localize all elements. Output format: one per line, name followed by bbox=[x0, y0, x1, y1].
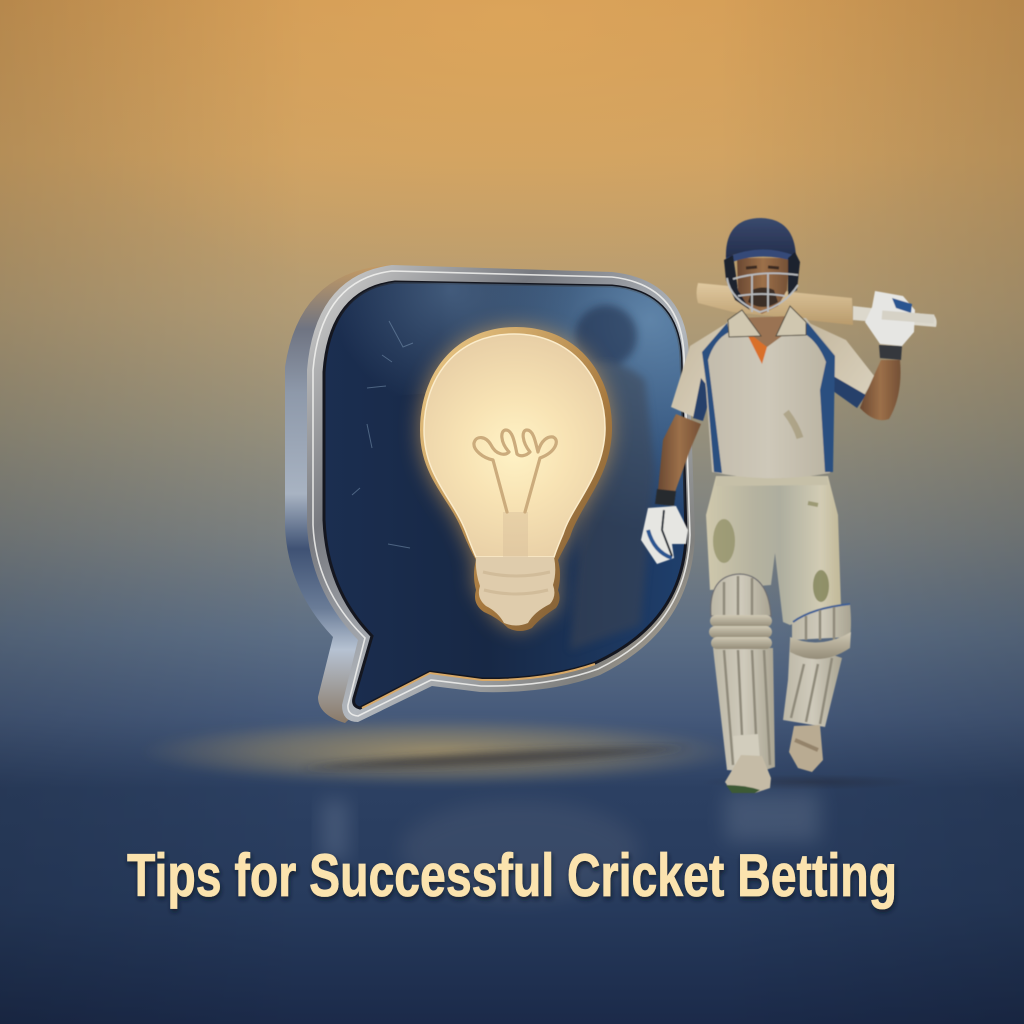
reflected silhouette of player bbox=[570, 305, 655, 650]
bulb border bbox=[420, 327, 612, 631]
back batting pad bbox=[783, 604, 851, 727]
bulb glass bbox=[424, 334, 605, 557]
surface scratches bbox=[352, 321, 413, 548]
bubble dark face bbox=[324, 282, 686, 708]
sleeves and arms bbox=[658, 322, 901, 492]
speech bubble with light bulb bbox=[285, 265, 695, 723]
cricket bat bbox=[696, 283, 937, 327]
cricket player bbox=[641, 218, 937, 793]
filament support bbox=[503, 512, 528, 557]
helmet shell bbox=[726, 218, 796, 260]
floor glow and shadow bbox=[140, 718, 920, 900]
bubble side depth bbox=[285, 265, 420, 723]
bulb glow halo bbox=[420, 327, 612, 631]
front batting pad bbox=[709, 574, 775, 772]
head with helmet bbox=[724, 218, 800, 314]
filament bbox=[474, 430, 556, 512]
bubble chrome rim bbox=[307, 265, 695, 722]
bulb base bbox=[476, 557, 555, 626]
torso shirt bbox=[702, 306, 835, 478]
light bulb bbox=[420, 327, 612, 631]
batting gloves bbox=[641, 291, 934, 564]
gold edge along the bubble bottom bbox=[362, 664, 595, 708]
face bbox=[737, 258, 789, 314]
cricket shoes bbox=[725, 725, 823, 793]
trousers bbox=[706, 476, 841, 625]
eyes and beard bbox=[746, 267, 779, 268]
